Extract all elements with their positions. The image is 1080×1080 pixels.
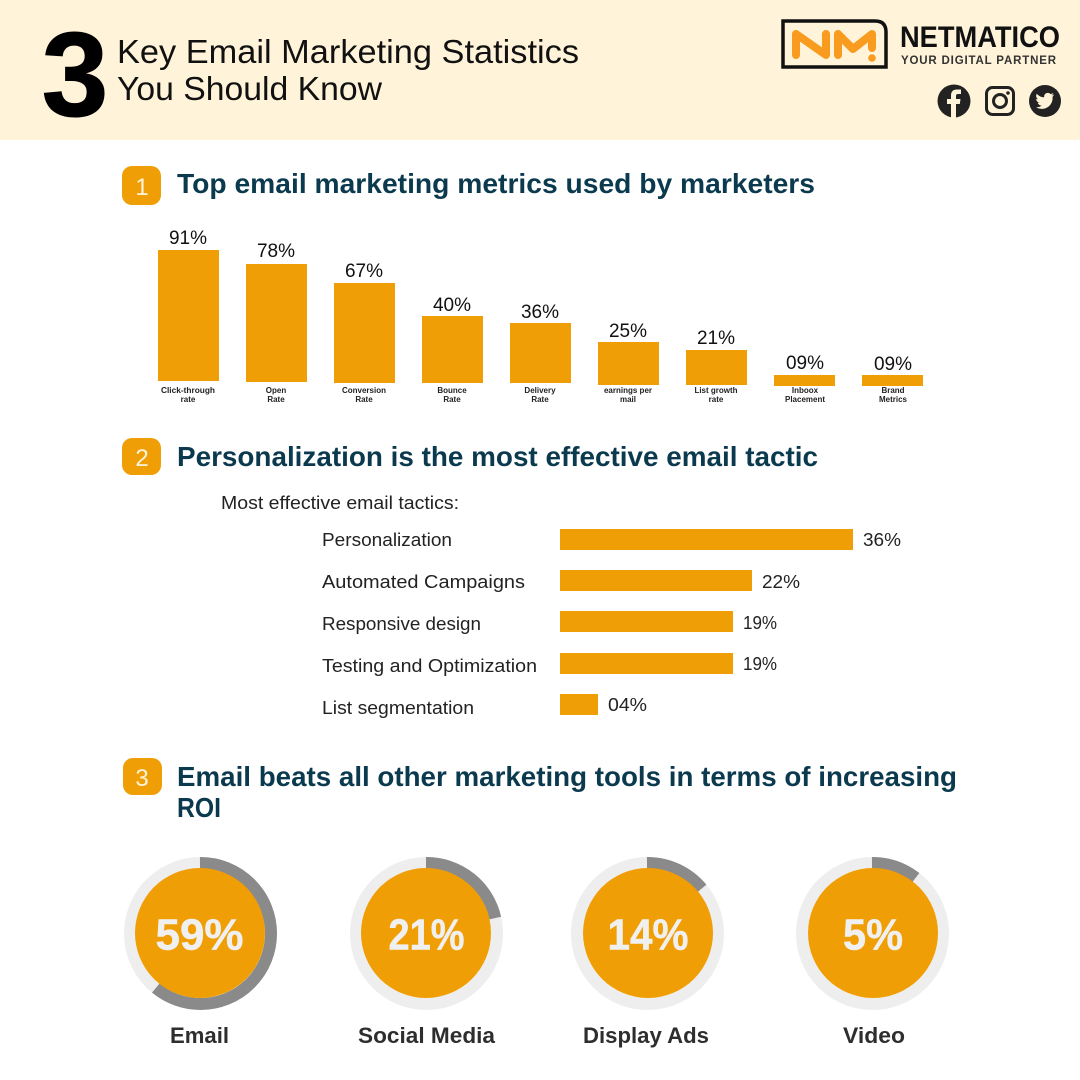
bar: open rate: Rate [267, 395, 285, 404]
section 1 heading: 1 [135, 174, 149, 201]
row: testing and optimization: Testing and Optimization [322, 656, 537, 676]
donut: display ads 14% [577, 863, 718, 1048]
bar: inbox placement: 09% [786, 353, 824, 374]
bar: inbox placement: Inboox [792, 386, 819, 395]
bar: earnings per mail: 25% [609, 321, 647, 342]
section 3 heading: 3 [135, 765, 149, 792]
chart subtitle: Most effective email tactics: [221, 493, 459, 513]
bar: conversion rate [334, 261, 395, 404]
bar: list growth rate [686, 328, 747, 404]
icon: facebook [938, 84, 970, 118]
section 2 heading: 2 [135, 445, 149, 472]
bar: brand metrics: 09% [874, 354, 912, 375]
header band [0, 0, 1080, 142]
row: personalization [322, 529, 901, 550]
logo [783, 21, 1060, 67]
donut charts [130, 863, 943, 1048]
title [117, 33, 579, 107]
section 3 heading: Email beats all other marketing tools in terms of increasing [177, 761, 957, 792]
section 1 heading: Top email marketing metrics used by marketers [177, 168, 815, 199]
icon: twitter [1029, 85, 1061, 117]
row: responsive design: Responsive design [322, 614, 481, 634]
bar: bounce rate: 40% [433, 295, 471, 316]
bar: delivery rate: Delivery [524, 386, 556, 395]
donut: display ads 14%: 14% [608, 910, 688, 960]
bar: conversion rate: 67% [345, 261, 383, 282]
title: You Should Know [117, 70, 382, 107]
bar: brand metrics: Brand [881, 386, 905, 395]
bar: conversion rate: Rate [355, 395, 373, 404]
icon: instagram [986, 88, 1014, 114]
donut: email 59%: 59% [156, 910, 244, 960]
bar: brand metrics: Metrics [879, 395, 908, 404]
section 3 heading [123, 758, 957, 823]
donut: email 59% [130, 863, 271, 1048]
bar: brand metrics [862, 354, 923, 404]
bar chart: top metrics [158, 228, 923, 404]
section 2 heading: Personalization is the most effective email tactic [177, 441, 818, 472]
row: automated campaigns: 22% [762, 572, 800, 592]
row: list segmentation: List segmentation [322, 698, 474, 718]
big number 3: 3 [42, 8, 108, 142]
donut: social media 21% [356, 863, 497, 1048]
bar: click-through rate: 91% [169, 228, 207, 249]
bar: bounce rate: Bounce [437, 386, 467, 395]
row: personalization: Personalization [322, 530, 452, 550]
donut: video 5% [802, 863, 943, 1048]
row: testing and optimization [322, 653, 777, 676]
bar: inbox placement: Placement [785, 395, 825, 404]
row: responsive design [322, 611, 777, 634]
donut: video 5%: Video [843, 1023, 905, 1048]
bar: click-through rate: rate [181, 395, 196, 404]
row: list segmentation [322, 694, 647, 718]
bar: inbox placement [774, 353, 835, 404]
logo: YOUR DIGITAL PARTNER [901, 55, 1057, 67]
bar: list growth rate: rate [709, 395, 724, 404]
bar: list growth rate: List growth [694, 386, 738, 395]
donut: display ads 14%: Display Ads [583, 1023, 709, 1048]
donut: social media 21%: Social Media [358, 1023, 496, 1048]
bar: list growth rate: 21% [697, 328, 735, 349]
bar: earnings per mail [598, 321, 659, 404]
donut: video 5%: 5% [843, 910, 903, 960]
title: Key Email Marketing Statistics [117, 33, 579, 70]
bar: open rate: 78% [257, 241, 295, 262]
bar: click-through rate [158, 228, 219, 404]
bar: conversion rate: Conversion [342, 386, 386, 395]
bar: earnings per mail: mail [620, 395, 636, 404]
row: testing and optimization: 19% [743, 654, 777, 674]
bar: bounce rate [422, 295, 483, 404]
bar chart: email tactics [322, 529, 901, 718]
row: personalization: 36% [863, 530, 901, 550]
bar: open rate [246, 241, 307, 404]
row: responsive design: 19% [743, 613, 777, 633]
section 3 heading: ROI [177, 792, 221, 823]
logo: NETMATICO [900, 21, 1060, 54]
row: automated campaigns: Automated Campaigns [322, 572, 525, 592]
bar: delivery rate: 36% [521, 302, 559, 323]
bar: delivery rate [510, 302, 571, 404]
bar: earnings per mail: earnings per [604, 386, 652, 395]
bar: delivery rate: Rate [531, 395, 549, 404]
row: automated campaigns [322, 570, 800, 592]
bar: click-through rate: Click-through [161, 386, 215, 395]
row: list segmentation: 04% [608, 695, 647, 715]
donut: email 59%: Email [170, 1023, 229, 1048]
bar: open rate: Open [266, 386, 286, 395]
donut: social media 21%: 21% [388, 910, 464, 960]
bar: bounce rate: Rate [443, 395, 461, 404]
